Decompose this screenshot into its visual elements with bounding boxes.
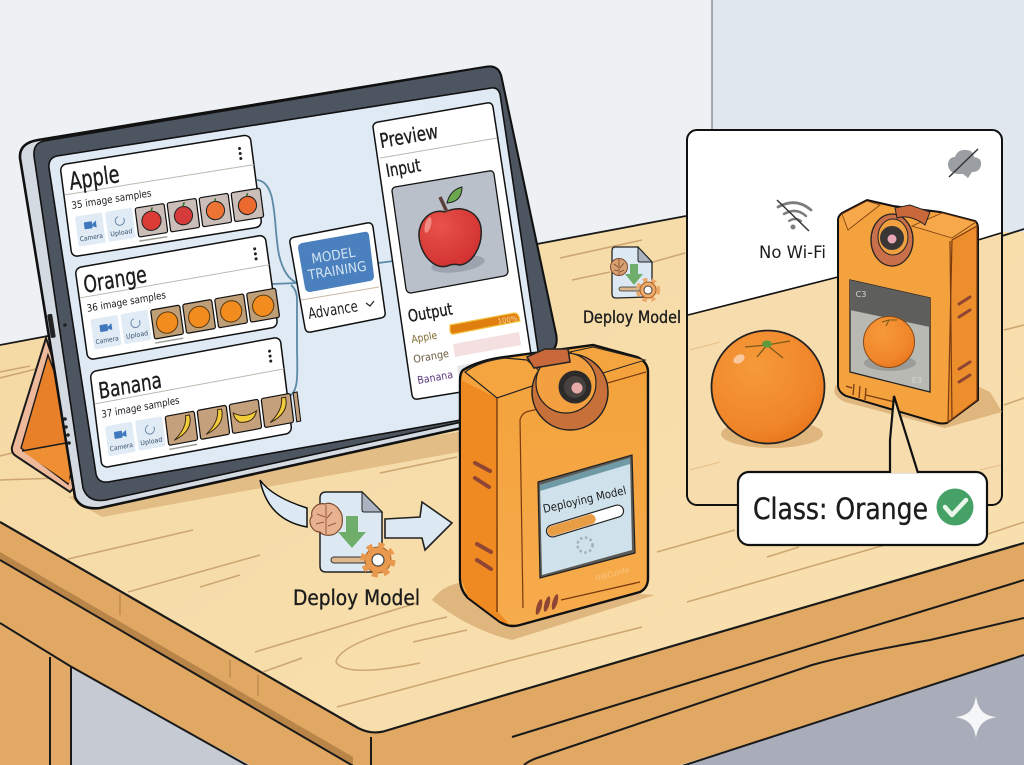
icon: gear — [363, 545, 393, 575]
mini screen: E3 — [912, 376, 922, 385]
preview title: Preview — [378, 119, 440, 153]
mini device — [838, 200, 978, 424]
upload button — [120, 310, 152, 344]
output label: Output — [406, 299, 454, 326]
label: small deploy model: Deploy Model — [583, 308, 681, 327]
device body — [460, 345, 648, 626]
output bars: Orange — [412, 348, 450, 366]
output bars: 100% — [497, 314, 519, 326]
output bars: Apple — [410, 330, 438, 346]
class title: Apple — [67, 159, 121, 196]
upload button: Upload — [110, 227, 133, 238]
device screen — [538, 455, 635, 578]
tablet — [20, 67, 556, 508]
upload button: Upload — [126, 329, 149, 341]
label: deploy model: Deploy Model — [293, 586, 420, 610]
sample count: 37 image samples — [101, 396, 180, 421]
upload button: Upload — [140, 436, 163, 447]
camera button: Camera — [109, 441, 133, 453]
mini screen — [850, 280, 930, 392]
tablet bezel — [34, 67, 556, 500]
wall above desk back edge — [0, 0, 1024, 345]
input image with apple — [392, 171, 508, 293]
icon: sparkle — [955, 696, 997, 738]
model training button: MODEL — [310, 245, 357, 267]
side buttons — [47, 314, 71, 445]
popup frame — [687, 130, 1002, 505]
output bars — [410, 313, 525, 387]
arrow to device — [385, 502, 452, 550]
upload button — [105, 208, 136, 242]
camera button: Camera — [79, 232, 103, 243]
mini device shadow — [834, 385, 1002, 428]
mini bottom vents — [846, 384, 895, 402]
output bars: Banana — [416, 369, 454, 387]
class title: Orange — [82, 261, 148, 299]
icon: brain — [310, 503, 342, 535]
deploying text: Deploying Model — [542, 483, 627, 516]
icon: small deploy model document — [610, 247, 658, 300]
apple thumbnails — [135, 188, 264, 237]
tablet body — [20, 67, 556, 508]
tablet shadow — [68, 430, 470, 517]
kebab menu — [253, 247, 258, 261]
kebab menu — [268, 349, 272, 363]
tablet screen — [49, 88, 546, 482]
camera module — [527, 349, 608, 430]
panel: orange class — [75, 234, 281, 360]
curved transfer arrow tail — [260, 480, 307, 527]
panel: model training — [290, 223, 385, 332]
panel: apple class — [60, 134, 265, 257]
sample count: 36 image samples — [86, 290, 167, 315]
input label: Input — [384, 155, 422, 182]
model training button: TRAINING — [306, 259, 368, 284]
panel: offline inference — [687, 130, 1002, 545]
mini screen: C3 — [856, 290, 866, 299]
progress bar — [545, 504, 625, 538]
class title: Banana — [97, 367, 163, 405]
device: deploying model — [460, 345, 648, 626]
device brand: U@Cuinfe — [595, 566, 630, 582]
mini camera — [871, 205, 930, 266]
orange fruit — [712, 330, 824, 448]
model training button — [298, 232, 374, 292]
callout: class orange — [738, 396, 987, 545]
device shadow — [432, 582, 655, 640]
device side vents — [475, 463, 491, 569]
sample count: 35 image samples — [71, 188, 152, 212]
floor and desk frame — [0, 500, 1024, 765]
panel: banana class — [90, 335, 302, 468]
camera button — [105, 422, 136, 457]
label: no wi-fi: No Wi-Fi — [759, 243, 826, 262]
wood grain — [0, 240, 1024, 707]
icon: check — [936, 488, 974, 526]
icon: cloud off — [948, 149, 981, 178]
upload button — [135, 416, 166, 451]
panel: preview — [373, 103, 535, 399]
kebab menu — [238, 147, 243, 160]
tablet stand — [12, 338, 90, 492]
camera button — [90, 315, 122, 350]
camera button — [75, 212, 106, 247]
class label: Class: Orange — [753, 492, 928, 526]
connectors — [257, 180, 394, 397]
icon: deploy model document — [310, 492, 393, 575]
banana thumbnails — [165, 392, 301, 445]
device bottom vents — [534, 594, 560, 615]
icon: no wifi — [777, 200, 811, 231]
advance dropdown: Advance — [307, 297, 359, 323]
mini side vents — [959, 297, 970, 382]
camera button: Camera — [95, 334, 119, 346]
orange thumbnails — [151, 288, 280, 339]
spinner — [578, 538, 592, 552]
